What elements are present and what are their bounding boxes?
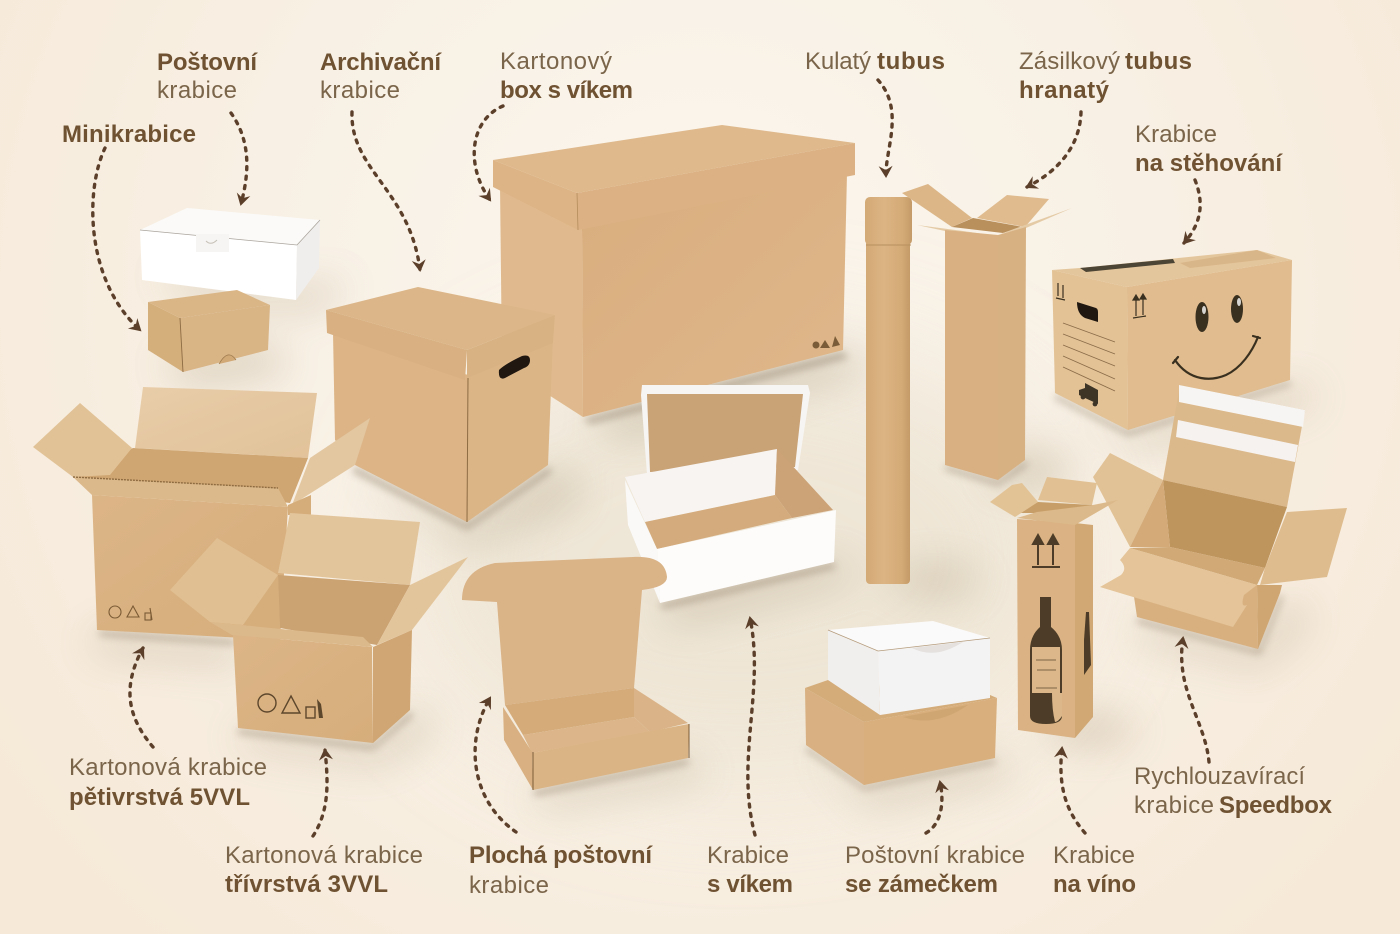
label: Poštovní krabice se zámečkem	[845, 842, 1025, 898]
icon: wine bottle	[1030, 597, 1062, 724]
label: Krabice na víno	[1053, 842, 1136, 898]
label: Kartonová krabice pětivrstvá 5VVL	[69, 754, 267, 811]
label: Poštovní krabice: Poštovní	[157, 49, 258, 76]
icon: truck	[1079, 383, 1098, 406]
label: Archivační krabice: krabice	[320, 77, 400, 104]
icon: recycling marks	[258, 694, 315, 718]
label: Krabice na stěhování: Krabice	[1135, 121, 1217, 148]
label: Krabice na víno: na víno	[1053, 871, 1136, 898]
label: Krabice na stěhování: na stěhování	[1135, 150, 1283, 177]
label: Kartonový box s víkem: box s víkem	[500, 77, 633, 104]
arrow: Minikrabice	[93, 148, 140, 330]
box: Minikrabice white	[140, 208, 320, 300]
label: Zásilkový tubus hranatý	[1019, 48, 1192, 104]
label: Kulatý tubus: tubus	[877, 48, 945, 75]
box: Zásilkový tubus hranatý	[902, 184, 1072, 480]
arrow: Kartonový box	[474, 106, 503, 200]
label: Kartonová krabice třívrstvá 3VVL: třívrstvá 3VVL	[225, 871, 388, 898]
label: Archivační krabice: Archivační	[320, 49, 442, 76]
box: Poštovní krabice se zámečkem	[805, 621, 997, 785]
label: Poštovní krabice: krabice	[157, 77, 237, 104]
label: Rychlouzavírací krabice Speedbox	[1134, 763, 1333, 819]
label: Plochá poštovní krabice	[469, 842, 653, 899]
box: Krabice na stěhování	[1052, 250, 1292, 430]
arrow: Zásilkový tubus	[1027, 112, 1081, 187]
arrow: 5VVL	[130, 648, 153, 747]
handle hole	[1077, 302, 1098, 322]
label: Poštovní krabice se zámečkem: se zámečkem	[845, 871, 998, 898]
label: Zásilkový tubus hranatý: tubus	[1125, 48, 1192, 75]
contact shadows	[98, 352, 1291, 796]
box: Kartonová krabice 5VVL	[33, 387, 370, 640]
icon: recycling marks	[812, 336, 840, 348]
arrow: s víkem	[748, 618, 755, 835]
box: Plochá poštovní krabice	[462, 557, 689, 790]
arrow: zámeček	[926, 782, 942, 833]
label: Kartonová krabice pětivrstvá 5VVL: pětivrstvá 5VVL	[69, 784, 250, 811]
box: Minikrabice kraft	[148, 290, 270, 372]
soft floor shadows	[90, 270, 1320, 808]
box: Kulatý tubus	[865, 197, 912, 584]
label: Kartonová krabice pětivrstvá 5VVL: Kartonová krabice	[69, 754, 267, 781]
label: Krabice s víkem	[707, 842, 793, 898]
box: Rychlouzavírací krabice Speedbox	[1093, 385, 1347, 649]
arrow: Poštovní	[231, 113, 247, 204]
label: Krabice na víno: Krabice	[1053, 842, 1135, 869]
label: Poštovní krabice	[157, 49, 258, 104]
arrow: stěhování	[1184, 180, 1200, 243]
arrow: Plochá poštovní	[475, 698, 516, 832]
label: Kartonová krabice třívrstvá 3VVL	[225, 842, 423, 898]
box: Krabice s víkem	[625, 385, 836, 603]
label: Minikrabice: Minikrabice	[62, 121, 196, 148]
label: Zásilkový tubus hranatý: hranatý	[1019, 77, 1110, 104]
handle hole	[499, 356, 530, 379]
arrow: Speedbox	[1182, 638, 1209, 762]
label: Zásilkový tubus hranatý: Zásilkový	[1019, 48, 1120, 75]
label: Rychlouzavírací krabice Speedbox: Speedbox	[1219, 792, 1333, 819]
label: Krabice s víkem: Krabice	[707, 842, 789, 869]
icon: up arrows	[1056, 283, 1146, 318]
label: Plochá poštovní krabice: Plochá poštovní	[469, 842, 653, 869]
arrow: 3VVL	[313, 750, 327, 836]
label: Kartonový box s víkem	[500, 48, 633, 104]
arrow: víno	[1061, 748, 1085, 833]
label: Krabice na stěhování	[1135, 121, 1283, 177]
box: Kartonová krabice 3VVL	[170, 513, 468, 743]
label: Poštovní krabice se zámečkem: Poštovní krabice	[845, 842, 1025, 869]
label: Kulatý tubus	[805, 48, 945, 75]
icon: smiley face	[1173, 295, 1260, 379]
label: Archivační krabice	[320, 49, 442, 104]
label: Kartonová krabice třívrstvá 3VVL: Kartonová krabice	[225, 842, 423, 869]
label: Krabice s víkem: s víkem	[707, 871, 793, 898]
label: Kartonový box s víkem: Kartonový	[500, 48, 612, 75]
icon: recycling marks	[109, 606, 152, 620]
label: Rychlouzavírací krabice Speedbox: krabice	[1134, 792, 1214, 819]
box: Kartonový box s víkem	[493, 125, 855, 417]
arrow: Archivační	[352, 112, 420, 270]
box: Archivační krabice	[326, 287, 555, 522]
label: Kulatý tubus: Kulatý	[805, 48, 871, 75]
icon: up arrows	[1032, 535, 1060, 567]
box: Krabice na víno	[990, 477, 1118, 738]
label: Rychlouzavírací krabice Speedbox: Rychlouzavírací	[1134, 763, 1305, 790]
label: Plochá poštovní krabice: krabice	[469, 872, 549, 899]
arrow: Kulatý tubus	[878, 80, 892, 176]
